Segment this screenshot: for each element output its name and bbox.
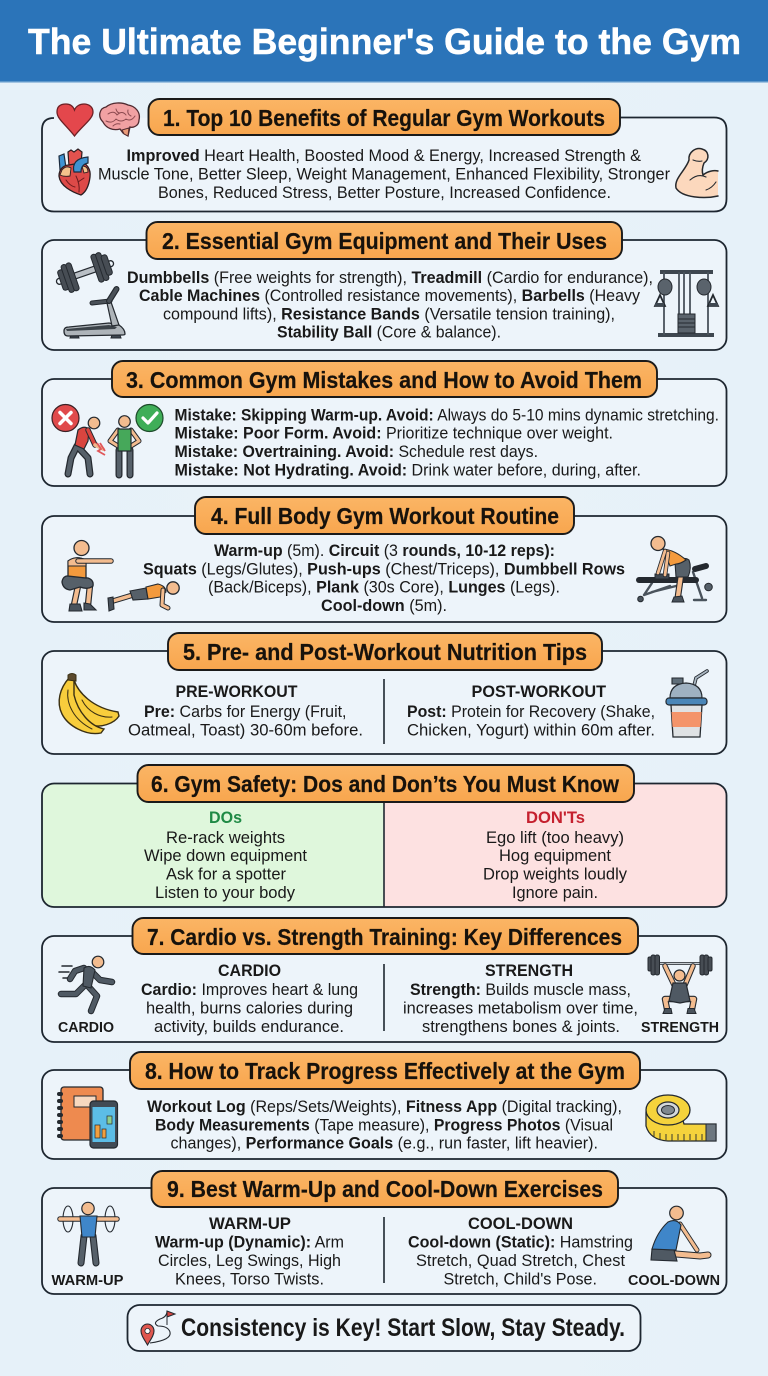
text block: benefits: Improved Heart Health, Boosted Mood & Energy, Increased Strength & (126, 146, 642, 165)
text block: cardio: health, burns calories during (146, 998, 353, 1018)
text block: donts: Hog equipment (499, 846, 611, 865)
text block: cardio: CARDIO (218, 961, 281, 980)
text block: donts: DON'Ts (526, 808, 585, 827)
text block: benefits: Bones, Reduced Stress, Better Posture, Increased Confidence. (158, 183, 611, 202)
heading: section 9 (152, 1171, 618, 1207)
text block: equipment (127, 268, 653, 342)
text block: dos: Listen to your body (155, 883, 295, 902)
text block: routine (143, 541, 625, 615)
panel section: donts (384, 784, 726, 907)
text block: benefits (98, 146, 670, 202)
label: cardio icon: CARDIO (58, 1020, 114, 1036)
heading: section 5 (168, 633, 602, 670)
heading: section 4: 4. Full Body Gym Workout Routine (211, 503, 559, 529)
text block: mistakes: Mistake: Not Hydrating. Avoid: Drink water before, during, after. (174, 460, 641, 480)
text block: warm-up: Circles, Leg Swings, High (158, 1251, 341, 1270)
callout: consistency footer (128, 1305, 640, 1351)
text block: pre-workout: Oatmeal, Toast) 30-60m before. (128, 720, 363, 740)
text block: dos: DOs (209, 808, 242, 827)
text block: dos: Wipe down equipment (144, 846, 307, 865)
text block: donts: Ignore pain. (512, 883, 598, 902)
icon: plank figure (108, 582, 179, 611)
text block: routine: Squats (Legs/Glutes), Push-ups (Chest/Triceps), Dumbbell Rows (143, 560, 625, 578)
text block: warm-up: Knees, Torso Twists. (175, 1270, 324, 1288)
text block: cool-down: Stretch, Child's Pose. (444, 1270, 597, 1288)
panel: 6 safety (42, 765, 726, 907)
text block: cool-down: Stretch, Quad Stretch, Chest (416, 1251, 625, 1270)
panel: 4 routine (42, 497, 726, 622)
text block: tracking: Body Measurements (Tape measure), Progress Photos (Visual (155, 1116, 613, 1134)
heading: section 9: 9. Best Warm-Up and Cool-Down Exercises (167, 1176, 603, 1202)
text block: tracking (147, 1097, 622, 1152)
text block: mistakes: Mistake: Skipping Warm-up. Avoid: Always do 5-10 mins dynamic stretching. (174, 406, 719, 424)
label: warm-up icon: WARM-UP (52, 1273, 124, 1289)
heading: section 1 (148, 99, 620, 135)
panel: 7 cardio vs strength (42, 918, 726, 1042)
heading: section 3: 3. Common Gym Mistakes and How to Avoid Them (126, 367, 642, 393)
icon: protein shaker (666, 671, 707, 737)
heading: section 6: 6. Gym Safety: Dos and Don’ts You Must Know (151, 771, 620, 797)
text block: equipment: Dumbbells (Free weights for strength), Treadmill (Cardio for endurance), (127, 268, 653, 287)
icon: runner (59, 956, 112, 1011)
text block: cardio (141, 961, 358, 1036)
label: strength icon: STRENGTH (641, 1020, 719, 1036)
icon: squat figure (62, 540, 111, 611)
icon: tape measure (646, 1095, 716, 1141)
heading: section 7 (132, 918, 638, 954)
heading: section 2: 2. Essential Gym Equipment and Their Uses (162, 228, 607, 254)
text block: pre-workout: PRE-WORKOUT (176, 682, 298, 701)
heading: section 1: 1. Top 10 Benefits of Regular Gym Workouts (163, 105, 605, 131)
icon: arm circles figure (60, 1202, 117, 1263)
text block: cardio: Cardio: Improves heart & lung (141, 980, 358, 999)
text block: cool-down: COOL-DOWN (468, 1214, 573, 1233)
text block: equipment: Stability Ball (Core & balance). (277, 322, 501, 342)
icon: route with pin and flag (141, 1311, 175, 1345)
text block: equipment: compound lifts), Resistance Bands (Versatile tension training), (163, 304, 615, 324)
panel: 2 equipment (42, 222, 726, 350)
text block: cool-down (408, 1214, 633, 1288)
text block: equipment: Cable Machines (Controlled resistance movements), Barbells (Heavy (139, 286, 640, 305)
text block: warm-up: WARM-UP (209, 1214, 291, 1233)
text block: mistakes (174, 406, 719, 480)
text block: mistakes: Mistake: Poor Form. Avoid: Prioritize technique over weight. (174, 424, 613, 442)
icon: seated stretch figure (651, 1206, 708, 1261)
panel: 1 benefits (42, 99, 726, 212)
heading: section 5: 5. Pre- and Post-Workout Nutrition Tips (183, 639, 587, 665)
panel: 5 nutrition (42, 633, 726, 754)
text block: routine: Warm-up (5m). Circuit (3 rounds, 10-12 reps): (214, 541, 555, 560)
panel: 9 warm-up and cool-down (42, 1171, 726, 1294)
text block: cardio: activity, builds endurance. (154, 1017, 344, 1036)
panel: 8 track progress (42, 1052, 726, 1159)
text block: dos: Re-rack weights (166, 828, 285, 847)
text block: tracking: Workout Log (Reps/Sets/Weights), Fitness App (Digital tracking), (147, 1097, 622, 1116)
text block: post-workout (407, 682, 655, 740)
heading: section 8 (130, 1052, 640, 1089)
text block: strength: Strength: Builds muscle mass, (410, 980, 631, 999)
text block: donts: Ego lift (too heavy) (486, 828, 624, 847)
text block: pre-workout (128, 682, 363, 740)
text block: mistakes: Mistake: Overtraining. Avoid: Schedule rest days. (174, 442, 538, 461)
text: consistency message: Consistency is Key! Start Slow, Stay Steady. (181, 1314, 625, 1342)
text block: post-workout: POST-WORKOUT (472, 682, 607, 701)
icon: weightlifter (648, 955, 712, 1014)
text block: strength: STRENGTH (485, 961, 573, 980)
text block: donts (483, 808, 627, 902)
heading: section 8: 8. How to Track Progress Effectively at the Gym (145, 1058, 625, 1084)
label: cool-down icon: COOL-DOWN (628, 1273, 720, 1289)
text block: dos: Ask for a spotter (166, 864, 286, 884)
text block: strength (403, 961, 638, 1036)
heading: section 4 (195, 497, 574, 534)
text block: strength: increases metabolism over time, (403, 998, 638, 1018)
icon: workout log and phone (59, 1087, 118, 1148)
icon: wrong form person (52, 404, 105, 474)
icon: heart (57, 104, 93, 136)
text block: warm-up: Warm-up (Dynamic): Arm (155, 1232, 344, 1252)
text block: warm-up (155, 1214, 344, 1288)
icon: brain (100, 103, 139, 136)
text block: cool-down: Cool-down (Static): Hamstring (408, 1232, 633, 1252)
icon: treadmill (64, 289, 125, 338)
heading: section 2 (146, 222, 622, 259)
text block: strength: strengthens bones & joints. (422, 1017, 620, 1036)
text block: dos (144, 808, 307, 902)
text block: benefits: Muscle Tone, Better Sleep, Weight Management, Enhanced Flexibility, Stronger (98, 164, 670, 184)
icon: cable machine (655, 272, 718, 335)
text block: post-workout: Chicken, Yogurt) within 60m after. (407, 720, 655, 740)
title banner (0, 0, 768, 82)
icon: flexed bicep (676, 149, 718, 197)
text block: donts: Drop weights loudly (483, 864, 627, 884)
panel section: dos (42, 784, 384, 907)
icon: anatomical heart (59, 149, 90, 195)
text block: routine: (Back/Biceps), Plank (30s Core), Lunges (Legs). (208, 578, 560, 596)
heading: section 3 (112, 361, 657, 397)
icon: dumbbell (52, 249, 118, 296)
text block: tracking: changes), Performance Goals (e.g., run faster, lift heavier). (170, 1134, 598, 1152)
text block: routine: Cool-down (5m). (321, 596, 447, 615)
icon: correct form person (110, 404, 163, 475)
icon: dumbbell row on bench (638, 536, 712, 602)
heading: section 6 (138, 765, 634, 802)
heading: section 7: 7. Cardio vs. Strength Training: Key Differences (147, 924, 622, 950)
icon: bananas (59, 674, 119, 734)
text block: post-workout: Post: Protein for Recovery (Shake, (407, 702, 655, 721)
panel: 3 mistakes (42, 361, 726, 486)
title banner: The Ultimate Beginner's Guide to the Gym (28, 21, 741, 62)
text block: pre-workout: Pre: Carbs for Energy (Fruit, (144, 702, 346, 721)
